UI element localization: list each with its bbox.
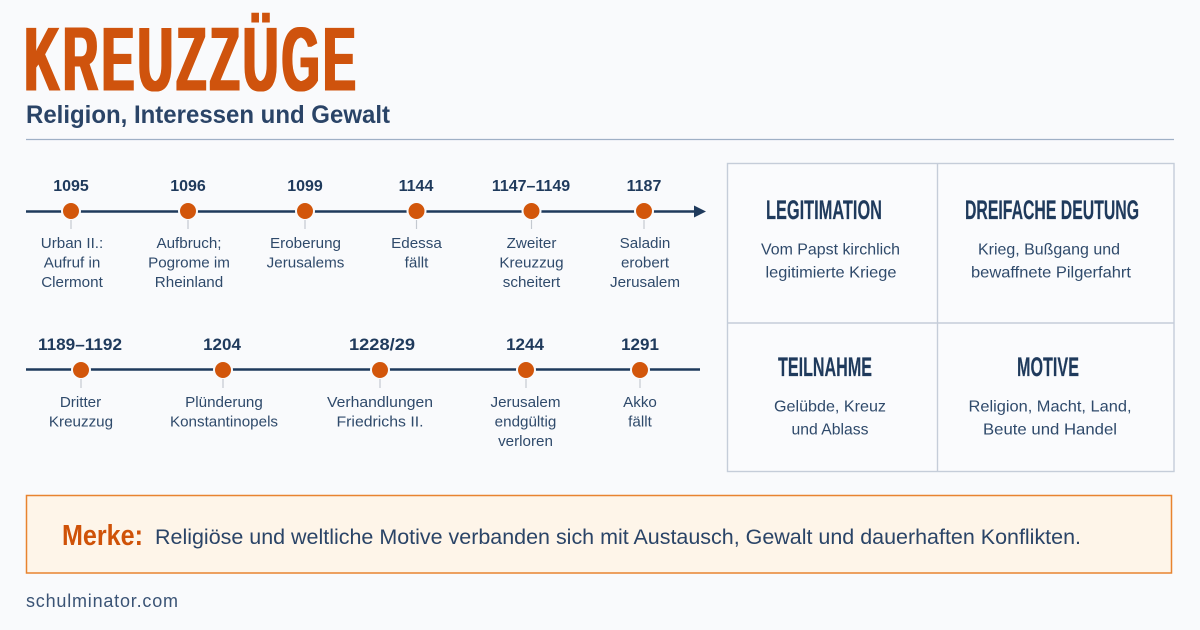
event 1096: Rheinland (155, 274, 223, 291)
cell: Motive: Religion, Macht, Land, (968, 398, 1132, 416)
event 1204: Konstantinopels (170, 414, 278, 430)
event 1147–1149: Zweiter (507, 235, 556, 252)
event 1204: 1204 (203, 335, 241, 354)
event 1095: Urban II.: (41, 235, 103, 252)
event 1096: 1096 (170, 178, 206, 195)
event 1204 (170, 335, 278, 430)
event 1147–1149 (492, 178, 570, 291)
footer: schulminator.com (26, 591, 178, 611)
cell: Teilnahme (774, 352, 886, 438)
event 1291: fällt (628, 414, 653, 430)
cell: Motive: MOTIVE (1017, 352, 1079, 382)
callout text: Religiöse und weltliche Motive verbanden sich mit Austausch, Gewalt und dauerhaften Konflikten. (155, 526, 1081, 549)
cell: Dreifache Deutung (965, 195, 1139, 282)
panel: four-cell grid (728, 164, 1174, 472)
event 1244: endgültig (495, 414, 556, 430)
event 1095 (41, 178, 104, 291)
cell: Teilnahme: TEILNAHME (778, 352, 872, 382)
event 1099: 1099 (287, 178, 323, 195)
cell: Motive: Beute und Handel (983, 422, 1117, 438)
event 1099 (267, 178, 345, 272)
cell: Teilnahme: Gelübde, Kreuz (774, 398, 886, 416)
cell: Dreifache Deutung: Krieg, Bußgang und (978, 242, 1120, 258)
event 1291 (621, 335, 659, 430)
cell: Legitimation: LEGITIMATION (766, 195, 882, 225)
event 1096: Pogrome im (148, 254, 230, 272)
event 1147–1149: scheitert (503, 274, 561, 291)
event 1187: Jerusalem (610, 274, 680, 291)
event 1099: Jerusalems (267, 254, 345, 272)
event 1187 (610, 178, 680, 291)
cell: Teilnahme: und Ablass (792, 422, 868, 438)
event 1244: Jerusalem (490, 394, 561, 411)
callout: Merke (26, 496, 1172, 573)
event 1147–1149: 1147–1149 (492, 178, 570, 195)
cell: Legitimation (761, 195, 900, 282)
event 1204: Plünderung (185, 394, 263, 411)
event 1096: Aufbruch; (156, 235, 222, 252)
event 1228/29 (327, 335, 433, 430)
event 1189–1192 (38, 335, 122, 430)
event 1244: verloren (498, 433, 553, 450)
callout label: Merke: (62, 520, 143, 552)
timeline row 1 (26, 178, 706, 291)
cell: Legitimation: legitimierte Kriege (766, 264, 897, 282)
event 1244: 1244 (506, 335, 544, 354)
subtitle: Religion, Interessen und Gewalt (26, 101, 391, 129)
event 1187: 1187 (627, 178, 661, 195)
event 1095: Aufruf in (44, 254, 100, 272)
event 1099: Eroberung (270, 235, 341, 252)
timeline row 2 (26, 335, 700, 450)
event 1228/29: Verhandlungen (327, 394, 433, 411)
event 1291: Akko (623, 394, 657, 411)
event 1095: 1095 (53, 178, 89, 195)
cell: Legitimation: Vom Papst kirchlich (761, 242, 900, 258)
arrow head (694, 206, 706, 218)
event 1144: 1144 (399, 178, 433, 195)
event 1095: Clermont (41, 274, 104, 291)
event 1096 (148, 178, 230, 291)
event 1189–1192: Kreuzzug (49, 414, 113, 430)
event 1291: 1291 (621, 335, 659, 354)
event 1187: erobert (621, 254, 670, 272)
event 1189–1192: 1189–1192 (38, 335, 122, 354)
event 1228/29: Friedrichs II. (336, 414, 424, 430)
event 1244 (490, 335, 561, 450)
event 1144 (391, 178, 442, 272)
title: KREUZZÜGE (24, 9, 359, 110)
event 1144: fällt (405, 254, 429, 272)
event 1147–1149: Kreuzzug (499, 254, 564, 272)
event 1144: Edessa (391, 235, 442, 252)
cell: Motive (968, 352, 1132, 438)
cell: Dreifache Deutung: bewaffnete Pilgerfahrt (971, 264, 1132, 282)
event 1228/29: 1228/29 (349, 335, 415, 354)
event 1187: Saladin (620, 235, 670, 252)
event 1189–1192: Dritter (60, 394, 101, 411)
